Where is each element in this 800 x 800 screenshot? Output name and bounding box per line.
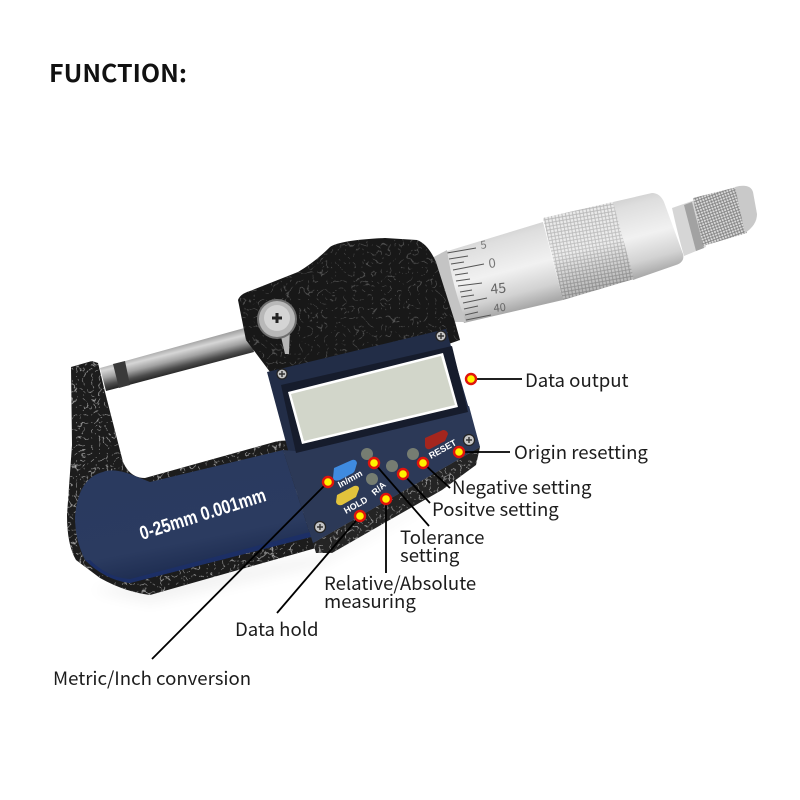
buttons [333, 460, 357, 481]
title: FUNCTION: [49, 54, 187, 89]
LCD screen [288, 353, 458, 444]
callout: negative setting [418, 458, 592, 500]
sleeve [432, 250, 466, 322]
graduated scale [447, 236, 507, 320]
callout: relative/absolute measuring [324, 494, 476, 614]
button labels: In/mm [336, 468, 364, 490]
LCD housing and control panel [267, 329, 480, 553]
range label: 0-25mm 0.001mm [137, 484, 269, 544]
button labels: R/A [370, 479, 388, 497]
blue scale plate [75, 450, 311, 583]
callout: tolerance setting [369, 458, 484, 568]
callout: origin resetting [454, 438, 648, 465]
graduated scale: 40 [493, 299, 507, 316]
knurled grip [543, 202, 634, 300]
locking screw [257, 299, 297, 354]
callout: metric/inch conversion [53, 477, 333, 691]
ratchet and knurled knob [672, 186, 757, 256]
graduated scale: 5 [479, 236, 488, 253]
callout: positive setting [398, 469, 559, 522]
button labels: HOLD [342, 494, 370, 516]
callout: data hold: Data hold [235, 615, 319, 642]
callout: tolerance setting: Tolerance [400, 523, 484, 550]
callout: data output: Data output [525, 366, 629, 393]
micrometer photo illustration [67, 186, 757, 603]
callout: data output [466, 366, 629, 393]
callout: relative/absolute measuring: Relative/Absolute [324, 569, 476, 596]
graduated scale: 45 [489, 277, 507, 299]
callout: metric/inch conversion: Metric/Inch conversion [53, 664, 251, 691]
button labels: RESET [427, 437, 459, 461]
graduated scale: 0 [487, 252, 497, 272]
button labels [336, 437, 459, 516]
callout: data hold [235, 511, 365, 642]
screws [277, 331, 474, 532]
callout: relative/absolute measuring: measuring [324, 587, 416, 614]
cast frame [67, 238, 460, 595]
callout: origin resetting: Origin resetting [514, 438, 648, 465]
callout: tolerance setting: setting [400, 541, 460, 568]
callout: negative setting: Negative setting [452, 473, 592, 500]
spindle [100, 327, 254, 391]
callout: positive setting: Positve setting [432, 495, 559, 522]
thimble barrel [432, 193, 683, 323]
